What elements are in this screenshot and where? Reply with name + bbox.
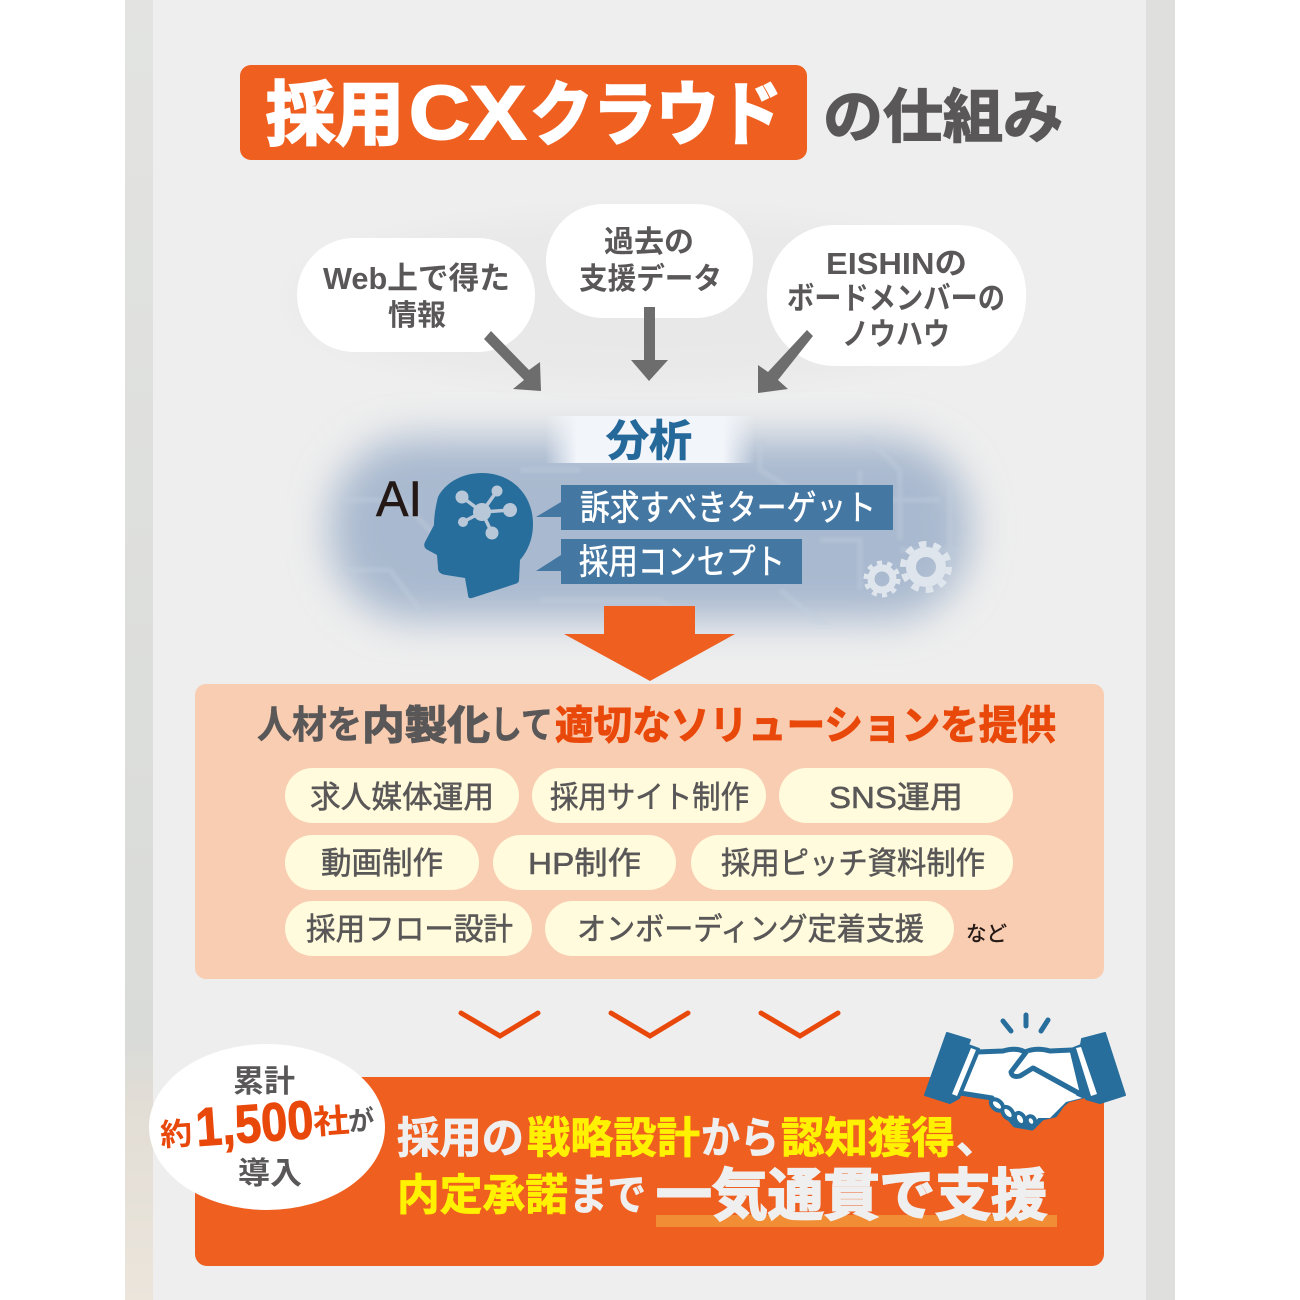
badge: 1500 companies: 社 [312, 1102, 350, 1141]
bubble: past support data [546, 204, 753, 318]
arrow: from know-how [758, 330, 813, 393]
title: クラウド [530, 76, 782, 154]
bubble: board member know-how: ボードメンバーの [787, 281, 1005, 316]
chevrons [461, 1013, 838, 1036]
badge: 1500 companies: が [347, 1104, 375, 1137]
pill: onboarding [545, 901, 954, 956]
pill: pitch deck: 採用ピッチ資料制作 [721, 846, 985, 881]
speech bubbles: data sources [290, 204, 1026, 385]
heading: solutions [257, 704, 1056, 748]
callout: target: 訴求すべきターゲット [580, 489, 876, 528]
badge: 1500 companies: 導入 [238, 1156, 302, 1191]
badge: 1500 companies: 約 [159, 1116, 193, 1153]
arrow: from past data [631, 307, 668, 381]
title: 採用 [266, 76, 404, 154]
pill: onboarding: オンボーディング定着支援 [577, 912, 924, 947]
circuit background [330, 430, 975, 630]
headline emphasis: 一気通貫で支援 [656, 1164, 1047, 1227]
bubble: past support data: 支援データ [579, 262, 722, 296]
bubble: web information: Web上で得た [323, 261, 510, 296]
icon: gears [866, 544, 949, 595]
title: の仕組み [823, 85, 1063, 150]
pill: SNS: SNS運用 [829, 780, 963, 815]
headline underline [656, 1215, 1057, 1227]
pill: recruiting flow: 採用フロー設計 [306, 912, 513, 947]
headline line 2: 内定承諾 [397, 1172, 568, 1220]
panel: AI analysis [330, 416, 975, 630]
title [240, 65, 1063, 160]
panel: solutions [195, 684, 1104, 979]
icon: handshake [925, 1015, 1125, 1128]
pill: video: 動画制作 [321, 846, 443, 881]
heading: solutions: 適切なソリューションを提供 [555, 704, 1056, 748]
callout: concept [536, 539, 802, 584]
bubble: web information: 情報 [388, 299, 446, 332]
bubble: board member know-how [767, 225, 1026, 366]
pill: video [285, 835, 479, 890]
pill: HP: HP制作 [528, 846, 641, 881]
badge: 1500 companies: 累計 [233, 1064, 295, 1099]
heading: solutions: 内製化 [362, 704, 490, 748]
heading glow [545, 416, 755, 463]
title: CX [409, 71, 526, 156]
heading: solutions: 人材を [257, 705, 362, 747]
pill: recruiting site: 採用サイト制作 [550, 780, 749, 815]
note: etc: など [966, 923, 1007, 946]
pill: recruiting site [532, 768, 766, 823]
panel: result banner [195, 1077, 1104, 1266]
headline line 2 [397, 1172, 646, 1220]
bubble: past support data: 過去の [604, 226, 694, 259]
pill: job media [285, 768, 519, 823]
badge: 1500 companies: 1,500 [194, 1090, 316, 1158]
callout: concept: 採用コンセプト [579, 543, 785, 582]
headline line 1: 採用の [397, 1115, 524, 1163]
arrow: from web information [484, 331, 541, 391]
pill: pitch deck [691, 835, 1013, 890]
headline line 1 [397, 1115, 999, 1163]
headline line 2: まで [569, 1172, 646, 1220]
headline line 1: から [701, 1115, 779, 1163]
bubble: board member know-how: EISHINの [826, 246, 967, 281]
badge: 1500 companies [149, 1044, 385, 1210]
icon: AI head [424, 473, 533, 598]
pill: recruiting flow [285, 901, 532, 956]
pill: SNS [779, 768, 1013, 823]
arrow: down to solutions [564, 606, 735, 681]
pill: job media: 求人媒体運用 [310, 780, 494, 815]
label: AI: AI [376, 471, 422, 527]
bubble: web information [297, 238, 535, 352]
heading: solutions: して [490, 705, 553, 747]
headline line 1: 戦略設計 [527, 1115, 700, 1163]
pill: HP [493, 835, 676, 890]
icon detail: fingers [989, 1097, 1037, 1127]
headline line 1: 、 [956, 1115, 999, 1163]
headline line 1: 認知獲得 [781, 1115, 955, 1163]
bubble: board member know-how: ノウハウ [842, 317, 950, 352]
heading: analysis: 分析 [606, 418, 692, 466]
